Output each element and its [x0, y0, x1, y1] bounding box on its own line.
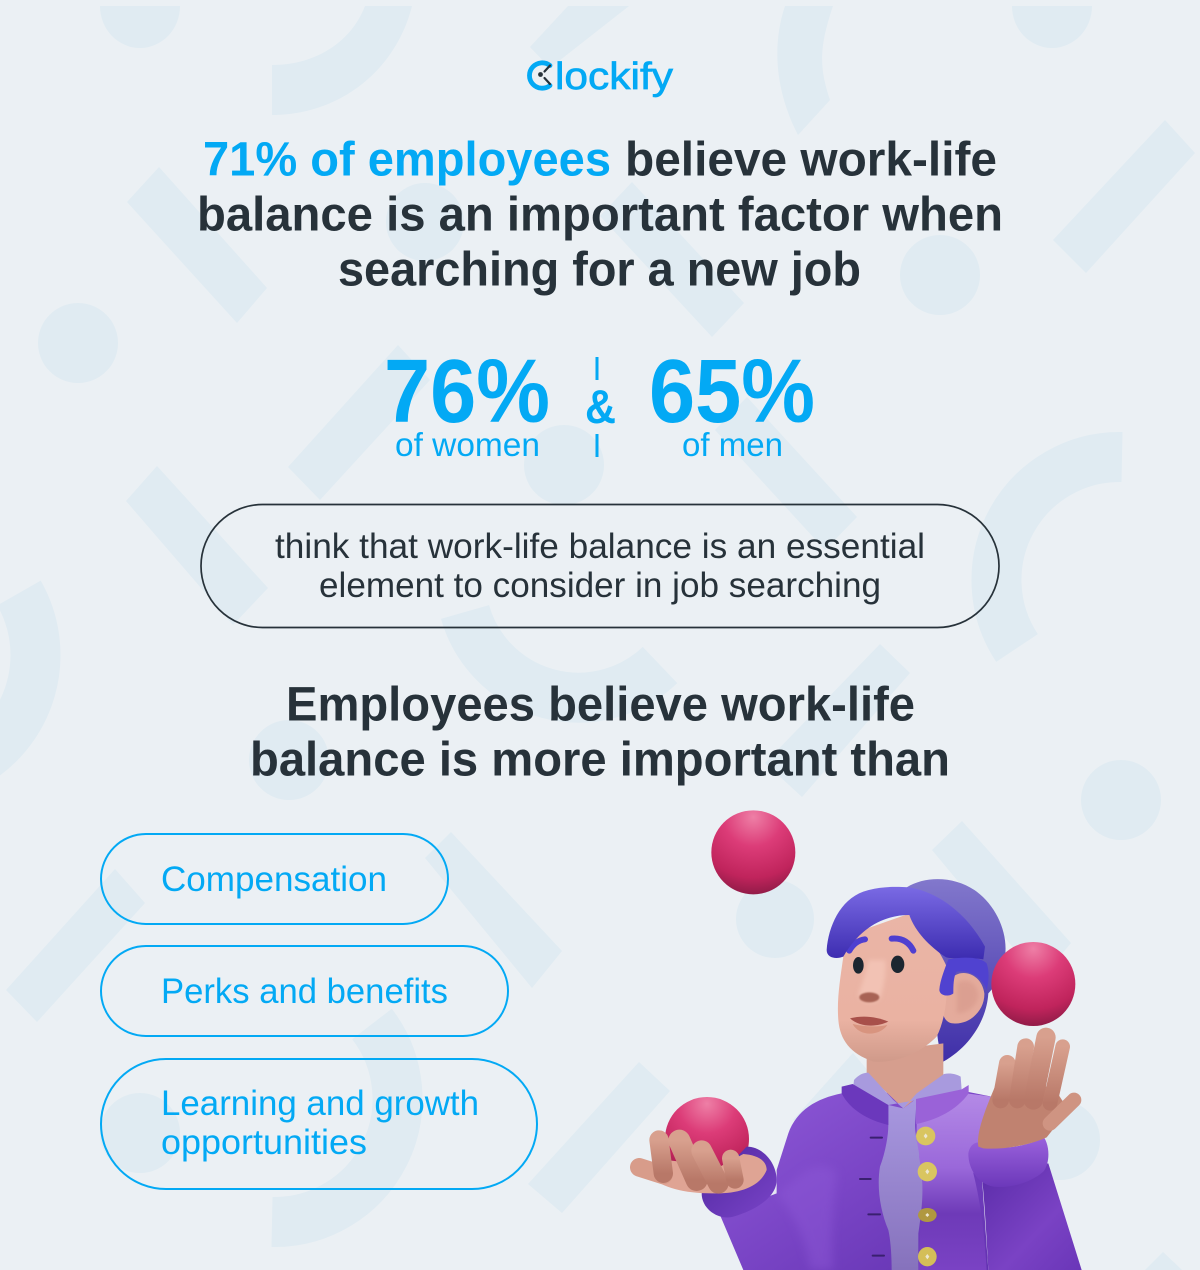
stat: 65% of men: of men [682, 426, 783, 463]
right cuff [968, 1137, 1048, 1187]
collar stand [853, 1073, 962, 1108]
eyebrows [849, 939, 913, 951]
illustration: person juggling balls [639, 810, 1082, 1270]
collar left [842, 1084, 888, 1125]
left hand [639, 1140, 767, 1193]
title: 71% of employees [203, 134, 611, 186]
heading: more important than: balance is more important than [250, 734, 950, 786]
jacket right panel [917, 1093, 992, 1270]
hair back [907, 879, 1006, 1062]
mouth [850, 1017, 888, 1034]
ball in left hand [665, 1097, 749, 1181]
stat: 65% of men: 65% [649, 342, 815, 442]
eyes [853, 956, 904, 974]
jacket body [720, 1092, 992, 1270]
logo wordmark: lockify [555, 56, 673, 98]
buttons [860, 1127, 937, 1266]
right arm [982, 1163, 1082, 1270]
left sleeve cuff [702, 1147, 777, 1218]
pill: perks and benefits [101, 946, 508, 1036]
pill: learning and growth opportunities [101, 1059, 537, 1189]
left arm fold [777, 1166, 837, 1270]
stat: 76% of women: of women [395, 426, 540, 463]
pill: compensation: Compensation [161, 860, 387, 899]
ampersand divider: & [585, 380, 616, 433]
title: believe work-life [625, 134, 997, 186]
stat: 76% of women: 76% [384, 342, 550, 442]
neck [867, 1043, 943, 1108]
logo: Clockify [529, 56, 673, 98]
head [838, 913, 947, 1062]
title: balance is an important factor when [197, 188, 1003, 242]
title [197, 134, 1003, 296]
ball right [991, 942, 1075, 1026]
sideburn [939, 958, 989, 996]
pill: perks and benefits: Perks and benefits [161, 972, 448, 1011]
pill: learning and growth opportunities: opportunities [161, 1123, 367, 1162]
hair front [827, 887, 985, 959]
title: searching for a new job [338, 244, 861, 296]
collar right [916, 1085, 969, 1124]
callout pill: think that work-life balance is an essential [275, 527, 925, 566]
pill: compensation [101, 834, 448, 924]
pill: learning and growth opportunities: Learning and growth [161, 1084, 479, 1123]
callout pill: element to consider in job searching [319, 566, 881, 605]
callout pill [201, 504, 999, 628]
ball top [711, 810, 795, 894]
nose [858, 960, 886, 1002]
ear [942, 973, 984, 1023]
heading: more important than: Employees believe work-life [286, 678, 915, 732]
heading: more important than [250, 678, 950, 786]
right hand [978, 1037, 1074, 1149]
shirt [879, 1098, 922, 1270]
ampersand divider [585, 357, 616, 457]
icon: clock C mark [529, 63, 550, 88]
